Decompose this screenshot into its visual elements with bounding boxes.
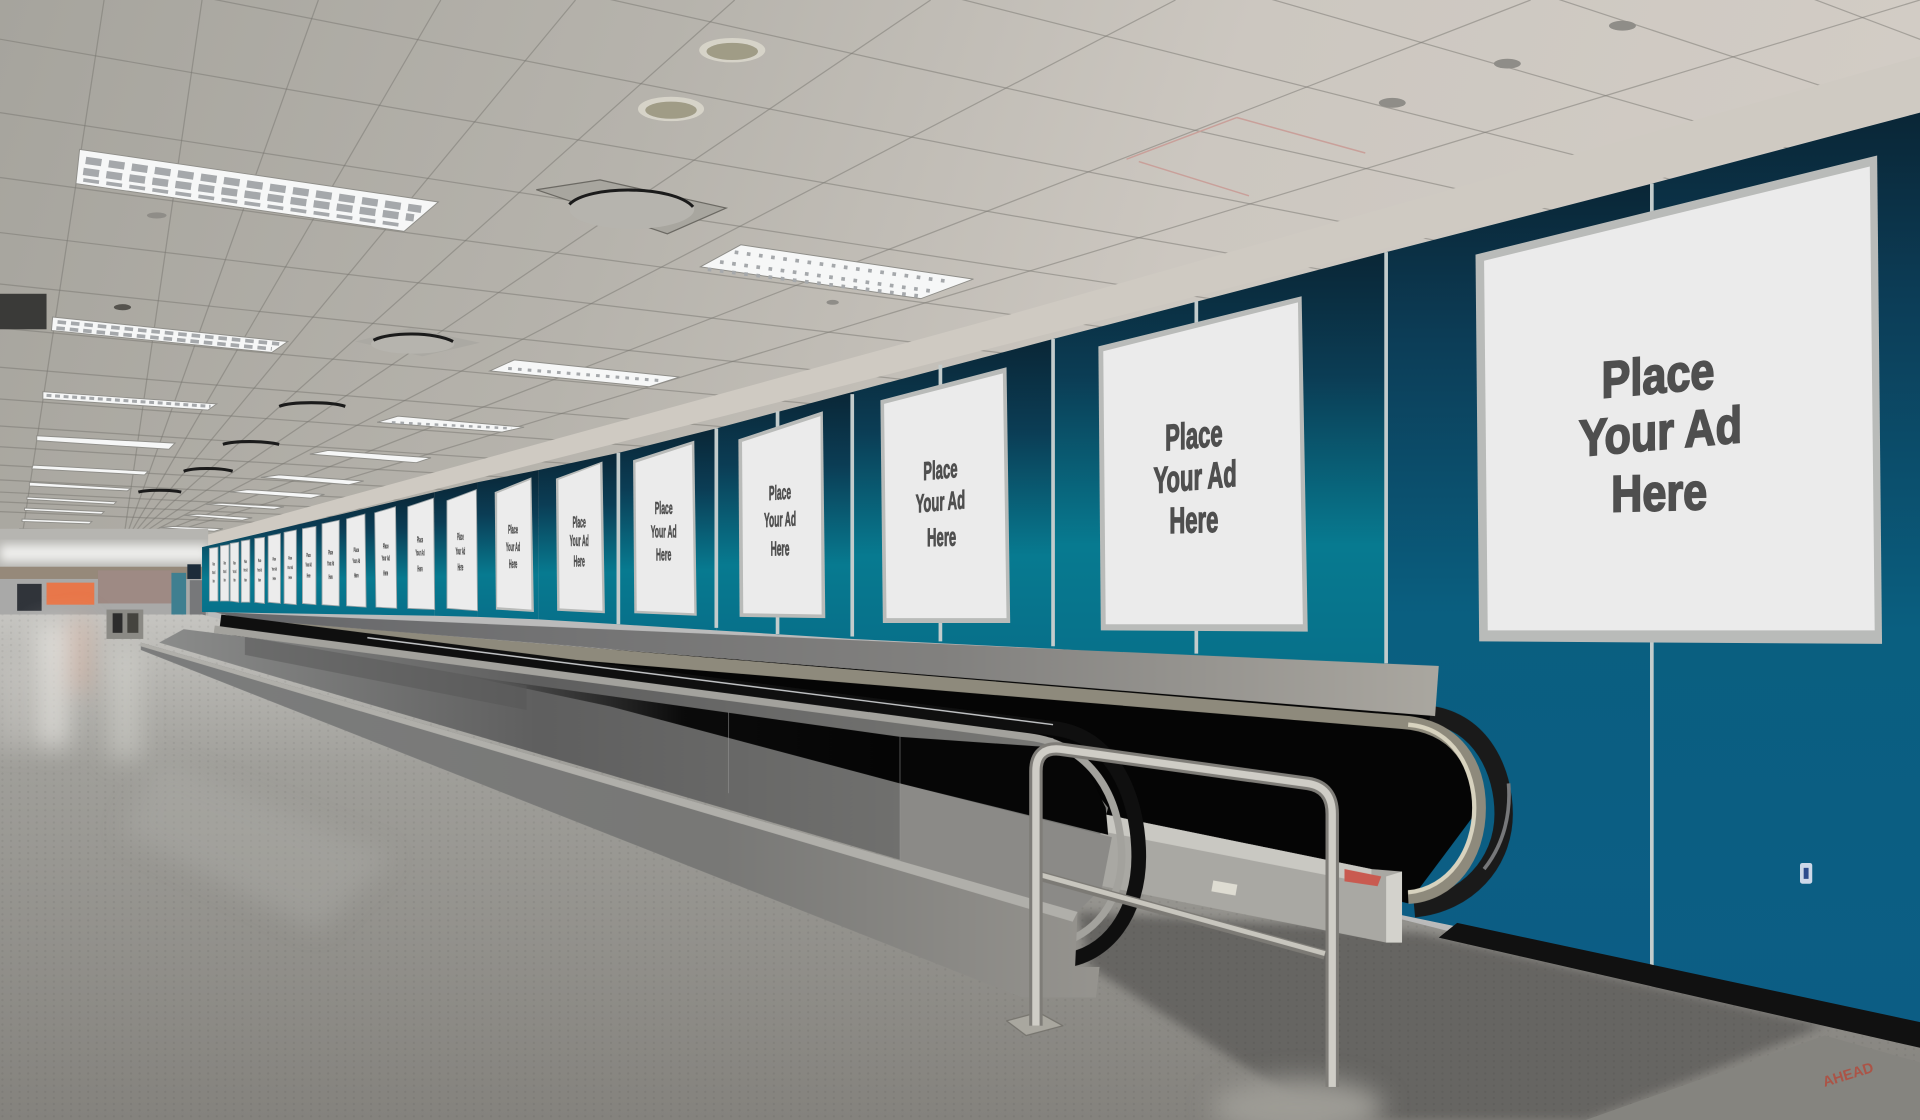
ad 4: Place — [769, 482, 791, 505]
ad 7: Your Ad — [506, 540, 520, 554]
ad 6: Your Ad — [570, 534, 589, 550]
ad 5: Your Ad — [651, 522, 677, 541]
ad 5: Here — [656, 545, 671, 565]
wall soffit band — [202, 56, 1920, 548]
ad 7: Place — [508, 523, 518, 536]
ad 15 — [268, 534, 280, 603]
far end of corridor — [0, 529, 208, 617]
ad 3: Place — [923, 456, 958, 486]
ad 18: Your Ad — [233, 569, 236, 574]
ad 6 — [556, 461, 605, 613]
far wall ads — [98, 570, 171, 603]
ad 20 — [209, 547, 218, 601]
ad 5 — [633, 441, 697, 616]
ad 8 — [447, 490, 478, 611]
ad 14: Here — [289, 575, 292, 580]
ad 2: Your Ad — [1153, 454, 1237, 502]
wall socket icon — [1800, 863, 1812, 884]
ad 19: Here — [224, 577, 226, 583]
ad 13 — [302, 526, 316, 605]
ad 11: Your Ad — [353, 558, 360, 566]
ad 9 — [408, 498, 435, 610]
ad 11 — [347, 514, 366, 607]
ad 13: Your Ad — [305, 561, 312, 568]
floor warning text: AHEAD — [1821, 1060, 1876, 1091]
teal wall — [202, 113, 1920, 1053]
ad 14: Place — [288, 555, 292, 561]
moving walkway — [107, 610, 1509, 998]
ad 16 — [255, 537, 264, 603]
ad 11: Here — [354, 572, 359, 580]
ad 14: Your Ad — [287, 565, 293, 571]
ad 12 — [322, 520, 339, 606]
back balustrade interior — [233, 619, 1484, 903]
floor reflections — [0, 618, 1384, 1120]
floor — [0, 614, 1920, 1120]
ad 11: Place — [354, 547, 359, 555]
ad 12: Place — [328, 549, 333, 556]
ad 1: Place — [1602, 343, 1714, 410]
ceiling dark fixture — [0, 294, 47, 329]
ad 20: Place — [213, 561, 215, 567]
end metal box — [906, 774, 1402, 943]
ad 16: Place — [258, 558, 261, 563]
ad 3: Here — [927, 524, 956, 553]
railing base plate — [1007, 1012, 1063, 1036]
ad 15: Place — [273, 557, 276, 562]
front glass balustrade — [159, 629, 1112, 912]
back handrail — [257, 627, 1509, 908]
ad 8: Here — [458, 562, 463, 573]
ad 17: Here — [244, 577, 247, 583]
ad 4 — [738, 411, 825, 618]
dark walkway landing — [1078, 912, 1824, 1120]
ad 10 — [375, 507, 397, 608]
ad 2: Here — [1169, 500, 1218, 542]
ad 10: Place — [383, 543, 389, 551]
ceiling light panels — [20, 149, 973, 532]
ad 5: Place — [655, 498, 673, 518]
ad 19: Place — [224, 560, 226, 566]
ad 8: Your Ad — [456, 546, 465, 557]
ad 18: Here — [233, 577, 236, 583]
ad 17 — [241, 540, 250, 602]
ad 10: Here — [383, 570, 388, 578]
ad 4: Here — [771, 539, 790, 561]
lower metal skirt — [141, 643, 1100, 998]
ad 12: Here — [329, 574, 333, 580]
far orange sign — [47, 583, 94, 605]
ad 6: Place — [573, 515, 586, 532]
ad 18: Place — [233, 560, 236, 566]
ad 15: Here — [273, 576, 276, 582]
ad 16: Here — [258, 577, 261, 583]
ad 9: Your Ad — [415, 549, 425, 558]
ad 3: Your Ad — [916, 487, 965, 519]
ad 14 — [284, 530, 296, 605]
ceiling vents — [114, 21, 1636, 492]
ad 20: Your Ad — [212, 570, 215, 575]
ad 9: Here — [417, 565, 423, 574]
front handrail — [214, 622, 1139, 961]
ceiling — [0, 0, 1920, 661]
wall panels — [202, 113, 1920, 1053]
ad 8: Place — [457, 532, 464, 543]
ad 19 — [220, 545, 229, 601]
far luggage cart — [107, 610, 143, 639]
ad 17: Place — [244, 559, 247, 564]
steel safety railing — [1007, 749, 1332, 1087]
ad 2 — [1098, 296, 1308, 632]
ad 3 — [880, 367, 1010, 623]
ad 1: Your Ad — [1579, 397, 1742, 468]
ad 15: Your Ad — [272, 566, 277, 572]
ad 4: Your Ad — [764, 509, 796, 532]
ad 13: Here — [307, 572, 311, 579]
ad 1: Here — [1611, 464, 1707, 524]
baseboard — [1439, 923, 1920, 1048]
advertising frames — [209, 155, 1882, 644]
ad 9: Place — [417, 535, 423, 545]
ad 16: Your Ad — [257, 568, 262, 573]
ad 13: Place — [306, 552, 311, 558]
top ledge — [214, 612, 1439, 716]
ad 2: Place — [1165, 414, 1223, 459]
ad 20: Here — [213, 578, 215, 584]
ad 19: Your Ad — [223, 569, 226, 574]
ad 6: Here — [574, 555, 585, 571]
ad 12: Your Ad — [327, 560, 334, 567]
ad 7: Here — [509, 557, 517, 571]
light corner floor plate — [1586, 1036, 1920, 1120]
ad 10: Your Ad — [382, 555, 390, 563]
ad 1 — [1476, 155, 1882, 644]
ad 7 — [495, 477, 534, 612]
ad 18 — [230, 542, 239, 602]
ad 17: Your Ad — [243, 568, 248, 573]
